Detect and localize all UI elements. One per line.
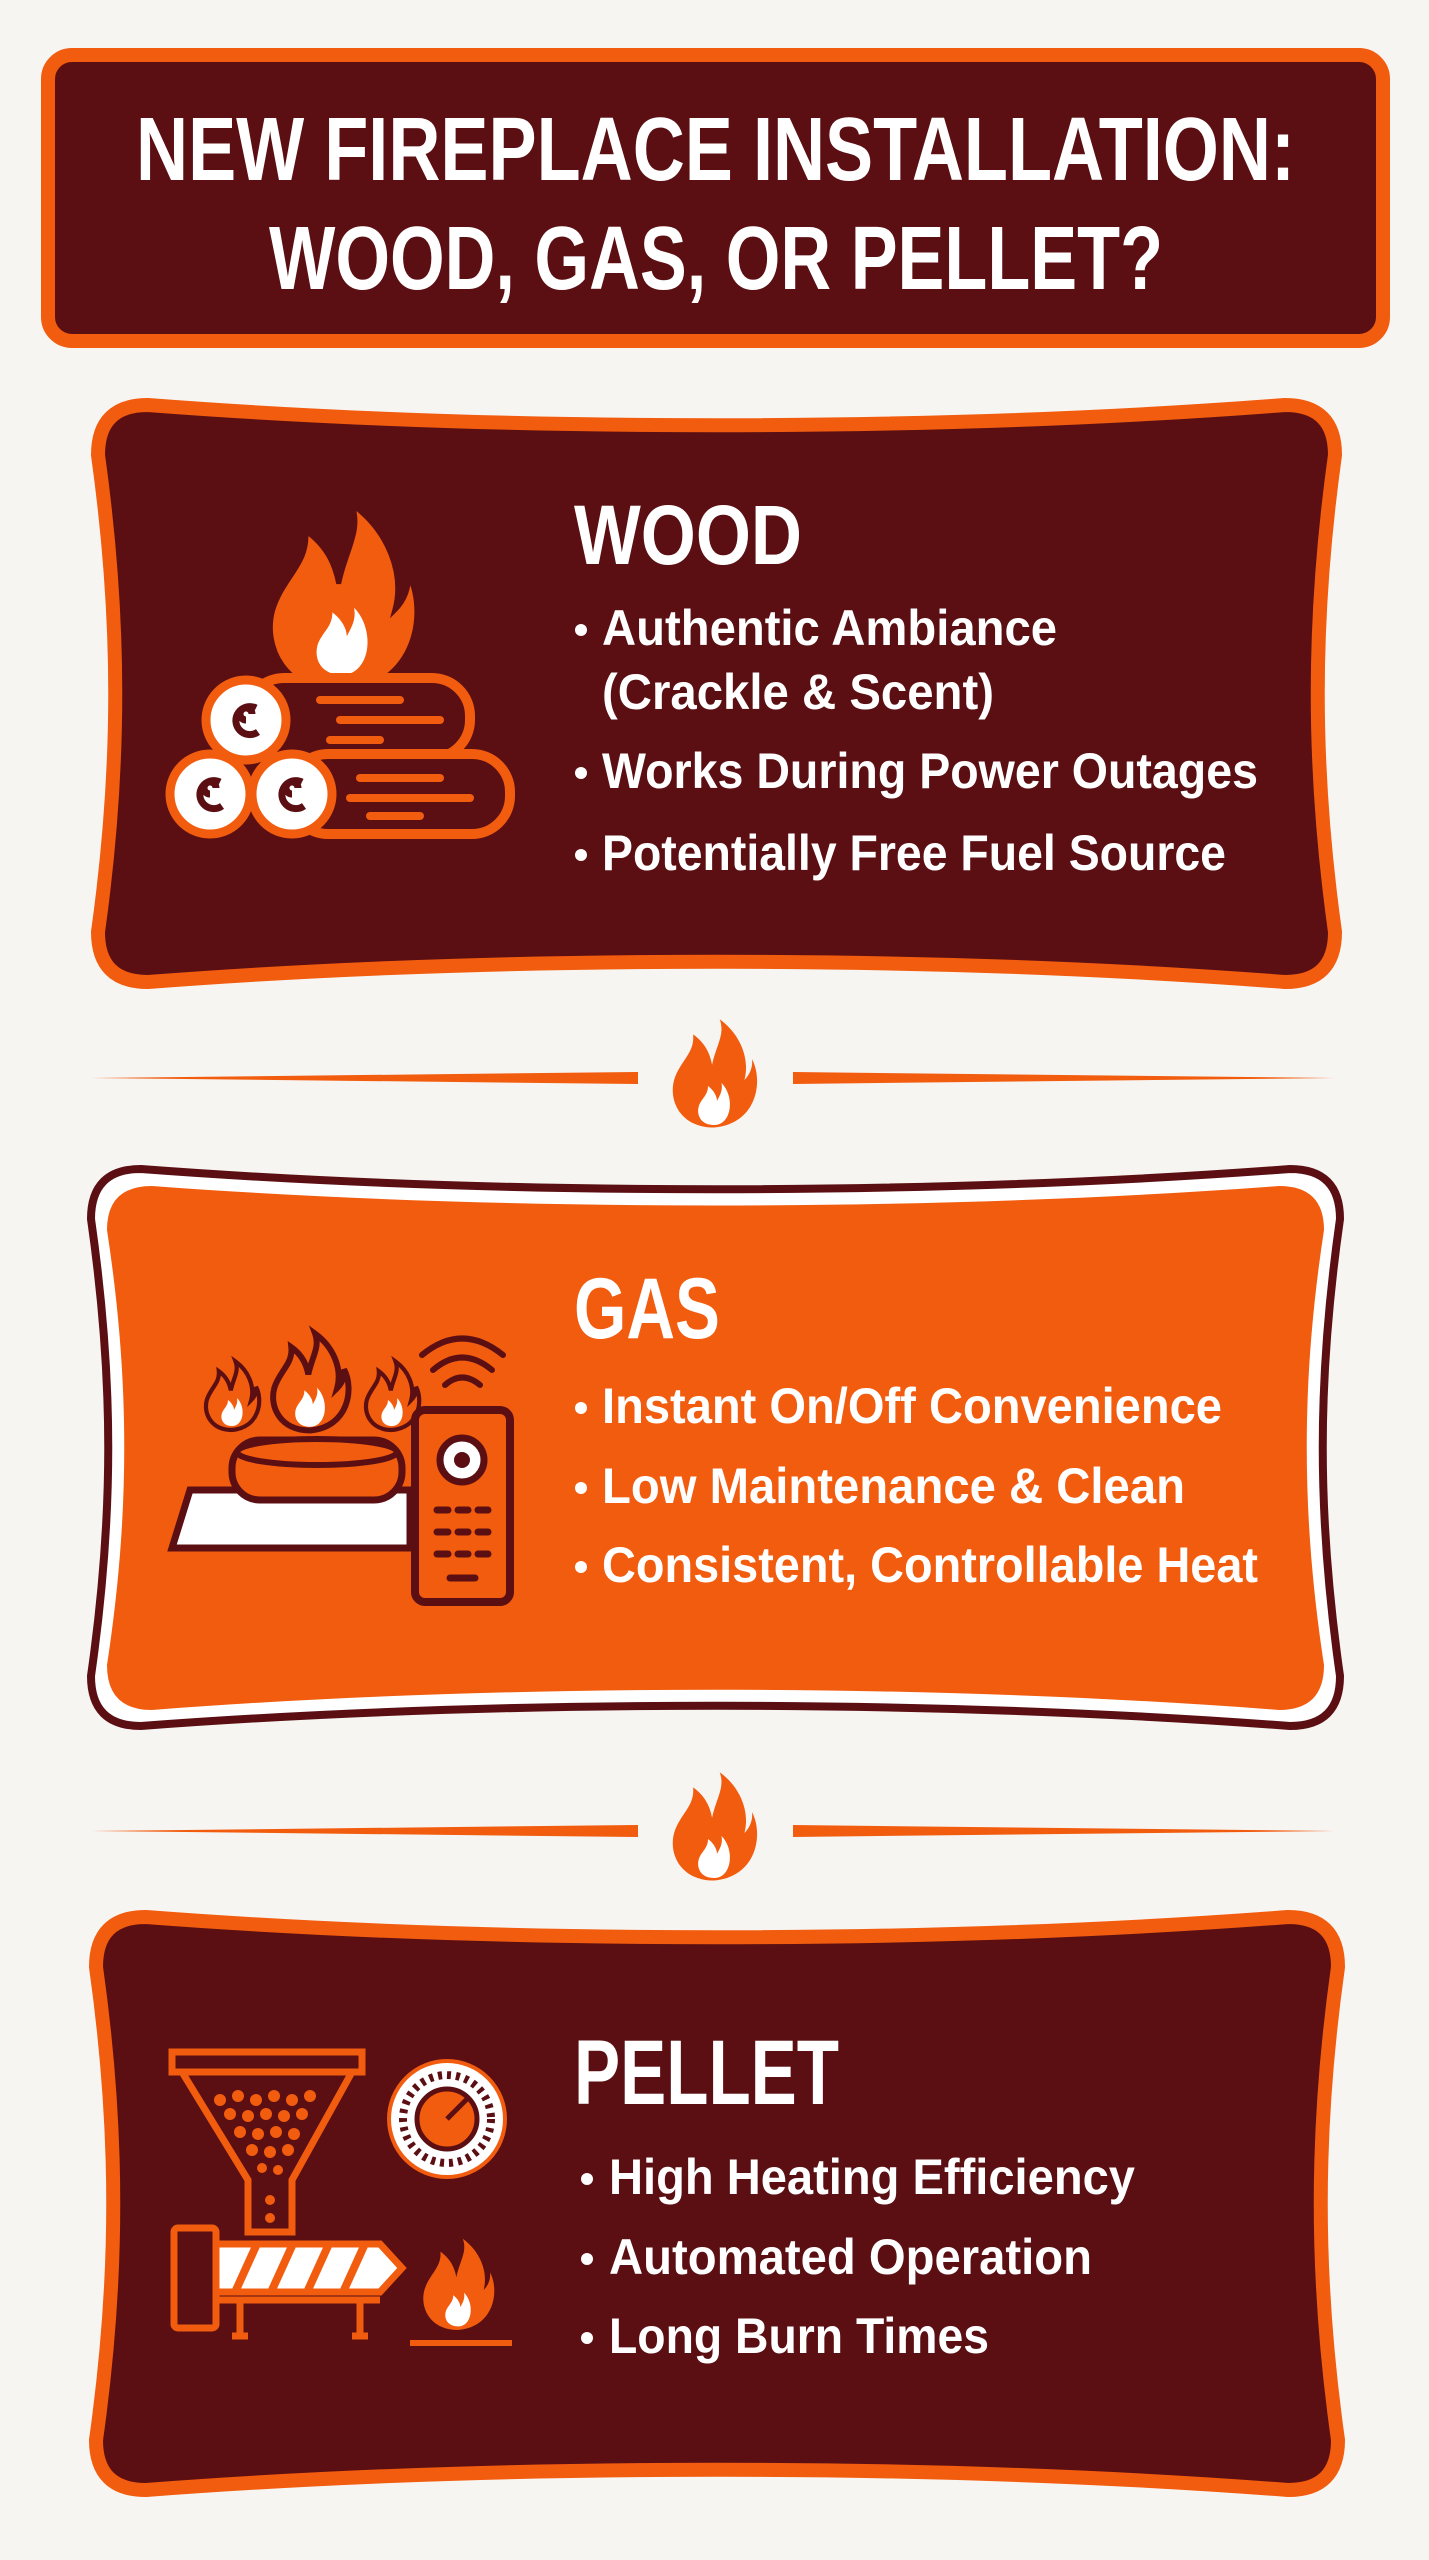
bullets: pellet: Long Burn Times — [609, 2308, 989, 2364]
bullets: pellet — [581, 2149, 1135, 2364]
bullets: gas: Consistent, Controllable Heat — [602, 1537, 1258, 1593]
bullets: pellet: Automated Operation — [609, 2229, 1092, 2285]
bullets: wood: Potentially Free Fuel Source — [602, 825, 1226, 881]
icon: campfire logs — [170, 504, 510, 834]
heading: pellet: PELLET — [574, 2022, 839, 2124]
bullets: gas — [575, 1378, 1258, 1593]
panel: pellet — [96, 1917, 1338, 2490]
title: WOOD, GAS, OR PELLET? — [269, 209, 1163, 309]
bullets: pellet: High Heating Efficiency — [609, 2149, 1135, 2205]
bullets: wood: Authentic Ambiance — [602, 600, 1057, 656]
divider 1 — [91, 1019, 1335, 1128]
heading: gas: GAS — [574, 1261, 720, 1357]
icon: divider flame — [673, 1772, 757, 1880]
icon: gas burner and remote — [172, 1334, 510, 1602]
panel: gas — [91, 1169, 1340, 1726]
heading: wood: WOOD — [574, 488, 802, 582]
panel: wood — [98, 405, 1335, 982]
divider 2 — [91, 1772, 1335, 1880]
bullets: gas: Instant On/Off Convenience — [602, 1378, 1222, 1434]
bullets: gas: Low Maintenance & Clean — [602, 1458, 1185, 1514]
bullets: wood — [575, 600, 1258, 881]
icon: pellet hopper, dial, flame — [172, 2052, 512, 2343]
bullets: wood: Works During Power Outages — [602, 743, 1258, 799]
bullets: wood: (Crackle & Scent) — [602, 664, 994, 720]
icon: divider flame — [673, 1019, 757, 1128]
title — [48, 55, 1383, 341]
